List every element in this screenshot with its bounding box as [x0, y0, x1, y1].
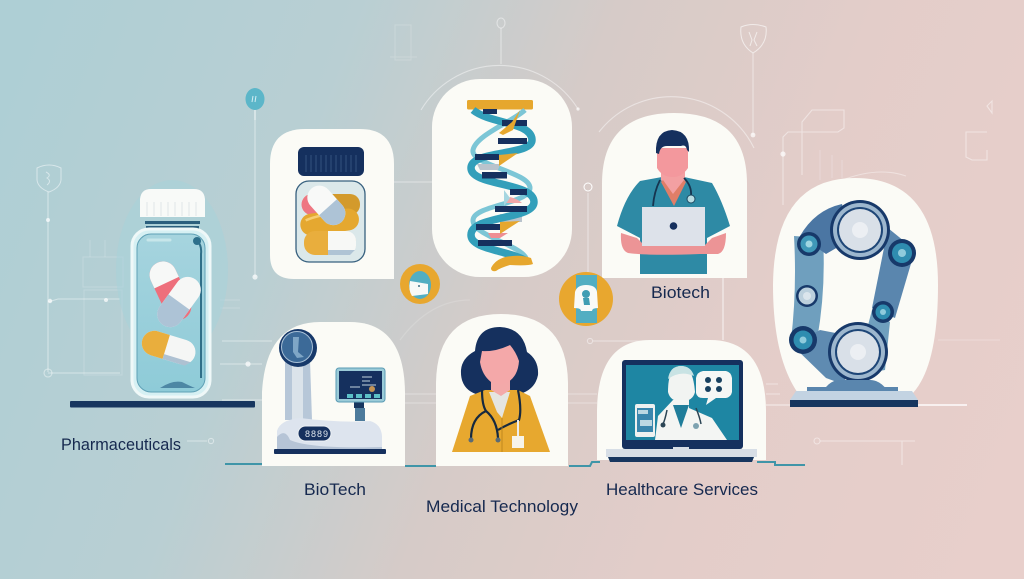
bottle cap — [140, 189, 205, 217]
bottle glow — [116, 180, 228, 360]
capsule: red and white — [145, 257, 196, 325]
jar body — [296, 181, 365, 262]
icon: shield left — [37, 165, 61, 192]
badge — [512, 436, 524, 448]
hair — [656, 130, 689, 154]
panel: large pill bottle — [116, 180, 228, 397]
robot arm — [789, 200, 918, 407]
head — [657, 148, 688, 177]
icon: shield top right — [741, 24, 766, 53]
icon: teal badge — [246, 88, 264, 120]
panel: DNA — [432, 79, 572, 277]
panel: female doctor — [436, 314, 568, 466]
label: Medical Technology: Medical Technology — [426, 498, 579, 516]
laptop screen — [622, 360, 743, 449]
panel: doctor with laptop — [602, 113, 747, 278]
laptop — [642, 207, 705, 246]
arms — [621, 233, 726, 255]
rear strand — [473, 110, 530, 258]
bottle neck — [145, 221, 200, 229]
blouse — [489, 392, 510, 418]
stethoscope — [653, 178, 691, 206]
icon: right gold badge — [559, 272, 613, 326]
neck — [491, 378, 510, 396]
jar cap — [298, 147, 364, 176]
device column — [285, 360, 312, 420]
helix front strand — [471, 110, 534, 262]
capsule: yellow and white — [139, 328, 199, 368]
button pill — [298, 426, 331, 441]
label: Biotech: Biotech — [651, 284, 710, 302]
doctor figure — [617, 130, 730, 274]
laptop base — [606, 449, 757, 457]
teal floor line — [225, 462, 805, 466]
torso — [617, 177, 730, 274]
gold connectors — [499, 110, 520, 135]
faint lab background motifs — [83, 25, 470, 375]
device base — [277, 418, 382, 449]
phone — [635, 404, 655, 437]
decorative circuit lines — [44, 18, 1000, 465]
label: Healthcare Services: Healthcare Services — [606, 481, 758, 499]
neck — [661, 165, 685, 198]
joint: bottom — [828, 322, 888, 382]
bottle shelf — [70, 401, 255, 408]
bottle body — [132, 229, 210, 397]
label: Pharmaceuticals: Pharmaceuticals — [61, 436, 181, 454]
joint: top — [830, 200, 890, 260]
panel: pill jar — [270, 129, 394, 279]
robot base — [823, 380, 888, 391]
label: BioTech: BioTech — [304, 481, 366, 499]
jacket — [452, 390, 550, 452]
display stand — [354, 402, 364, 408]
capsule: white and blue — [152, 272, 206, 332]
small joints — [797, 232, 821, 256]
panel: medical device: 8889 — [305, 429, 329, 439]
panel: medical device — [262, 322, 405, 466]
panel: telehealth laptop — [597, 340, 766, 462]
telehealth doctor — [655, 366, 727, 440]
base pairs — [475, 109, 527, 246]
base pair shading — [477, 164, 522, 222]
chat bubble — [696, 371, 732, 405]
stacked capsules — [299, 181, 360, 255]
device footing — [274, 449, 386, 454]
icon: left gold badge — [400, 264, 440, 304]
hair — [461, 327, 538, 395]
dna helix — [467, 100, 534, 271]
panel: robotic arm — [773, 178, 938, 407]
face — [480, 345, 519, 384]
stethoscope — [471, 390, 520, 439]
gauge — [279, 329, 317, 367]
display — [336, 368, 385, 402]
